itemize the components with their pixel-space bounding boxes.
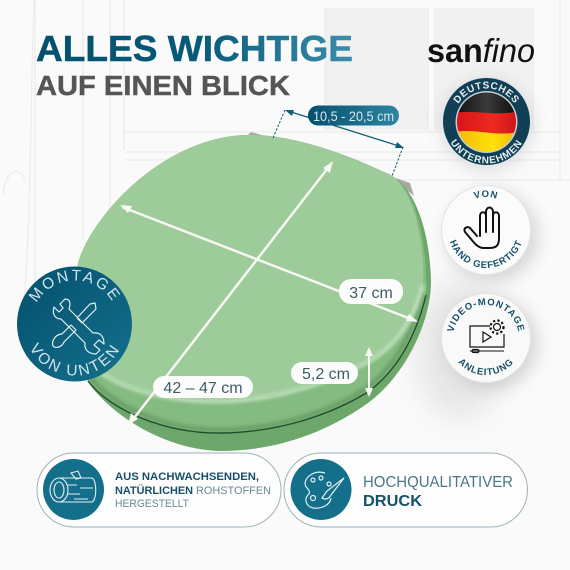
label: 37 cm [339, 279, 403, 304]
icon: paint palette [290, 459, 352, 520]
badge: Video-Montage Anleitung: ANLEITUNG [458, 359, 512, 375]
hinges [248, 132, 414, 196]
panel: sustainable materials [37, 453, 281, 527]
badge: Video-Montage Anleitung: VIDEO-MONTAGE [447, 298, 525, 332]
panel: high quality print: DRUCK [363, 493, 423, 510]
icon: wooden log [43, 459, 104, 520]
label: 42-47 cm [153, 376, 253, 398]
badge: Montage von unten: MONTAGE [28, 270, 120, 302]
dimension: hinge spacing [273, 106, 404, 176]
badge: Montage von unten: VON UNTEN [32, 342, 119, 376]
title: AUF EINEN BLICK [36, 70, 290, 101]
badge: Von Hand gefertigt [440, 184, 544, 287]
badge: Deutsches Unternehmen: UNTERNEHMEN [451, 138, 522, 164]
icon: video gear [470, 320, 504, 352]
seat lid top surface [78, 135, 423, 399]
panel: high quality print [284, 453, 528, 527]
toilet seat [77, 132, 431, 451]
icon: hand [464, 208, 499, 248]
seat lid edge band [77, 135, 426, 433]
seat lower rim [77, 135, 431, 451]
dimension: hinge spacing: 10,5 - 20,5 cm [313, 109, 394, 124]
title [36, 28, 353, 101]
title: ALLES WICHTIGE [36, 28, 353, 69]
panel: sustainable materials: AUS NACHWACHSENDEN, [115, 471, 259, 483]
badge: Video-Montage Anleitung [442, 292, 544, 394]
logo: sanfino: sanfino [427, 32, 535, 69]
badge: Von Hand gefertigt: VON [473, 190, 498, 198]
label: 42-47 cm: 42 – 47 cm [163, 380, 243, 397]
label and arrow: 5,2 cm [291, 347, 373, 397]
icon: wrench and screwdriver [53, 299, 104, 354]
arrow: seat length 42-47 cm [128, 161, 333, 425]
badge: Deutsches Unternehmen: DEUTSCHES [453, 82, 519, 104]
arrow: seat width 37 cm [120, 205, 418, 322]
badge: Montage von unten [17, 266, 132, 382]
badge: Deutsches Unternehmen [438, 76, 537, 175]
panel: sustainable materials: NATÜRLICHEN ROHSTOFFEN [115, 484, 271, 497]
label: 37 cm: 37 cm [349, 285, 393, 302]
badge: Von Hand gefertigt: HAND GEFERTIGT [450, 240, 522, 268]
label and arrow: 5,2 cm: 5,2 cm [302, 366, 350, 383]
panel: high quality print: HOCHQUALITATIVER [363, 474, 513, 491]
panel: sustainable materials: HERGESTELLT [115, 498, 189, 510]
